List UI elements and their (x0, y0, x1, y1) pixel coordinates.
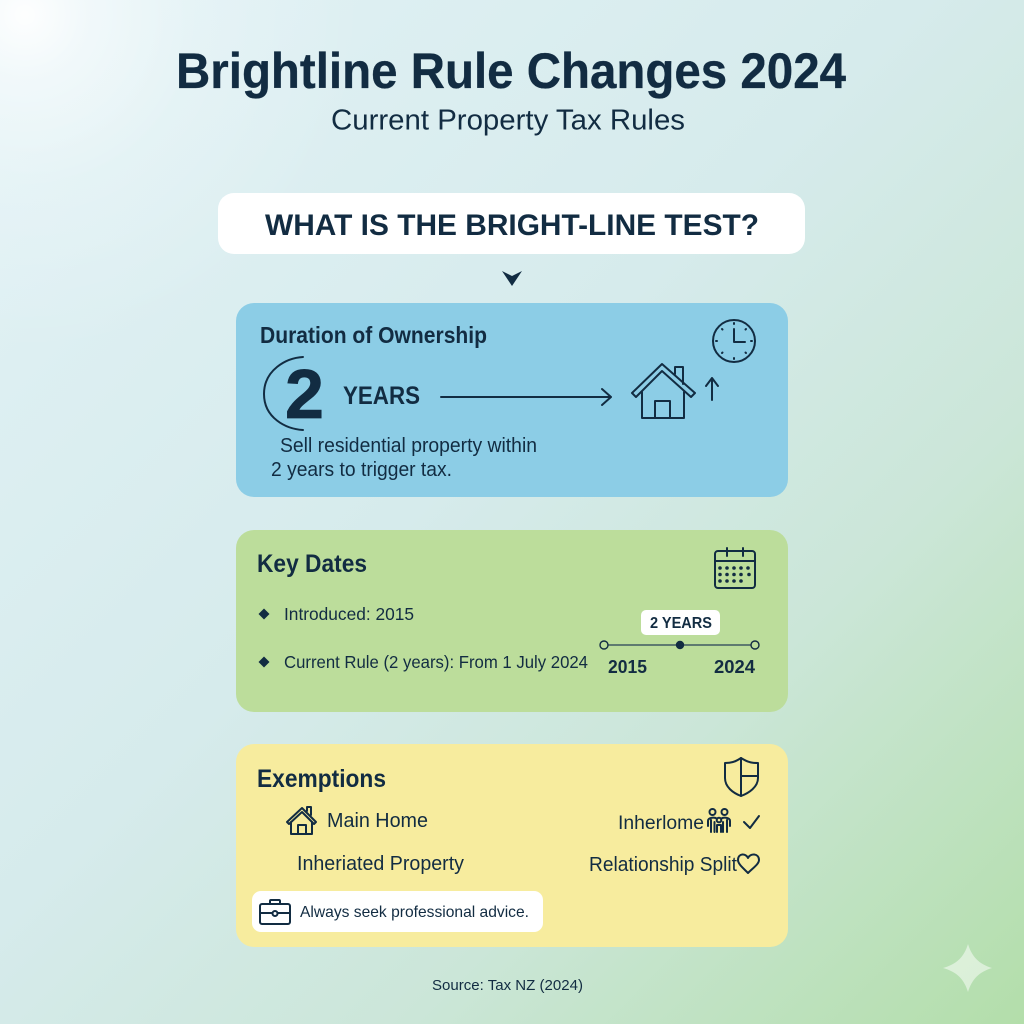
callout: professional advice: Always seek professional advice. (300, 904, 529, 921)
title: Brightline Rule Changes 2024 (176, 43, 846, 99)
item: inherlome: Inherlome (618, 813, 704, 834)
icon: up arrow (706, 378, 718, 400)
banner: what is the bright-line test: WHAT IS THE BRIGHT-LINE TEST? (265, 209, 759, 242)
badge: 2 years: 2 YEARS (650, 615, 712, 632)
bullet: current rule: Current Rule (2 years): From 1 July 2024 (284, 652, 588, 672)
description: Sell residential property within (280, 435, 537, 457)
arrow: to house (441, 389, 611, 405)
timeline: 2024 (714, 657, 755, 677)
icon: house (632, 364, 695, 418)
item: main home: Main Home (327, 810, 428, 832)
arc around number (264, 357, 303, 430)
panel: exemptions (236, 744, 788, 947)
years label: YEARS (343, 382, 420, 410)
subtitle: Current Property Tax Rules (331, 104, 685, 136)
source: Source: Tax NZ (2024) (432, 977, 583, 994)
callout: professional advice (252, 891, 543, 932)
timeline: 2015 (608, 657, 647, 677)
banner: what is the bright-line test (218, 193, 805, 254)
item: inherited property: Inheriated Property (297, 853, 464, 875)
heading: key dates: Key Dates (257, 550, 367, 578)
heading: duration of ownership: Duration of Ownership (260, 322, 487, 348)
icon: briefcase (260, 900, 290, 924)
item: main home (287, 807, 428, 834)
item: inherlome (618, 809, 759, 834)
heading: exemptions: Exemptions (257, 765, 386, 793)
icon: shield (725, 758, 758, 796)
badge: 2 years (641, 610, 720, 635)
icon: check (744, 816, 759, 828)
bullet: introduced: Introduced: 2015 (284, 604, 414, 624)
description: 2 years to trigger tax. (271, 459, 452, 481)
icon: sparkle (943, 944, 992, 992)
icon: heart (738, 854, 759, 873)
item: relationship split: Relationship Split (589, 854, 737, 876)
panel: key dates (236, 530, 788, 712)
description (271, 435, 537, 481)
timeline (600, 610, 759, 677)
icon: down chevron (502, 271, 522, 286)
icon: family (708, 809, 730, 832)
big number 2: 2 (285, 355, 324, 433)
icon: calendar (715, 548, 755, 588)
panel: duration of ownership (236, 303, 788, 497)
icon: clock (713, 320, 755, 362)
